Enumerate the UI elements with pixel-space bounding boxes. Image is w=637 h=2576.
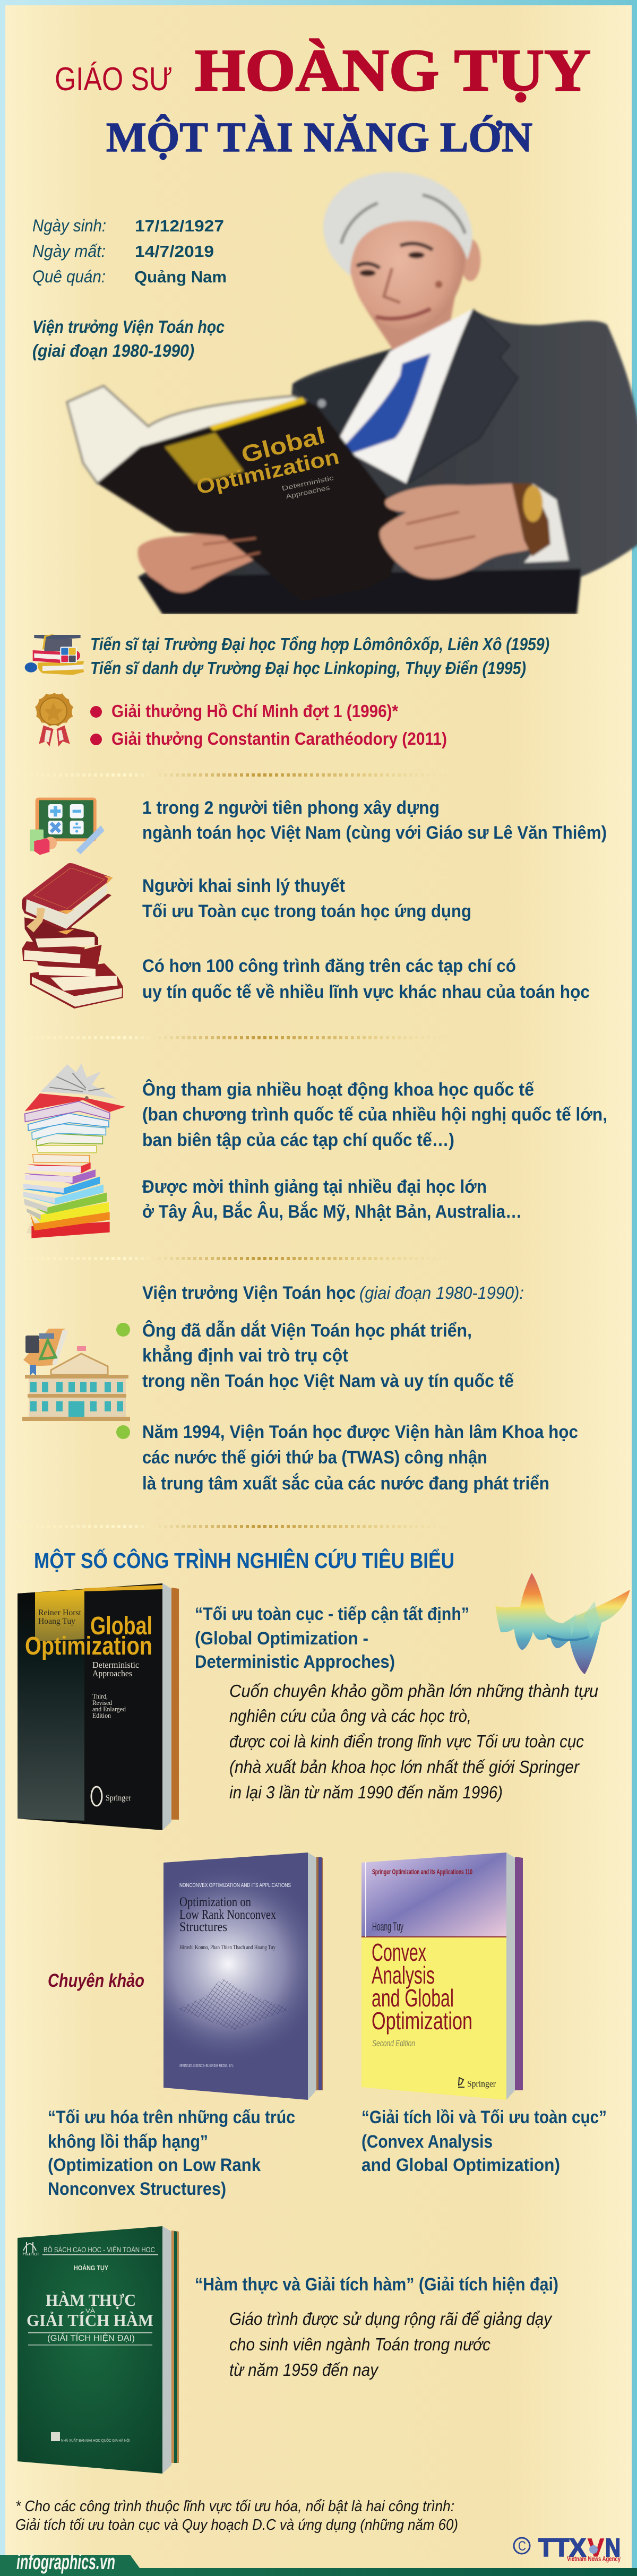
book: Convex Analysis and Global Optimization: Convex: [372, 1939, 426, 1966]
caption: convex analysis: “Giải tích lồi và Tối ưu toàn cục”: [361, 2107, 607, 2127]
book description: Global Optimization: “Tối ưu toàn cục - tiếp cận tất định”: [195, 1604, 469, 1624]
book: Global Optimization: Deterministic: [92, 1660, 139, 1670]
book: Hàm thực và Giải tích hàm: GIẢI TÍCH HÀM: [27, 2311, 153, 2330]
book: Global Optimization: Third,: [92, 1692, 108, 1700]
bullet: leading the institute: [116, 1320, 514, 1391]
caption: convex analysis: (Convex Analysis: [361, 2132, 493, 2152]
icon: medal: [35, 693, 73, 747]
book: Convex Analysis and Global Optimization: Springer: [467, 2079, 496, 2089]
detail: hometown: Quảng Nam: [134, 268, 227, 286]
international activities text: (ban chương trình quốc tế của nhiều hội nghị quốc tế lớn,: [142, 1105, 607, 1125]
logo: TTXVN copyright: N: [605, 2534, 621, 2562]
book description: Hàm thực và Giải tích hàm: cho sinh viên ngành Toán trong nước: [229, 2334, 490, 2354]
bullet: TWAS recognition: Năm 1994, Viện Toán học được Viện hàn lâm Khoa học: [142, 1422, 578, 1442]
visiting lecturer text: ở Tây Âu, Bắc Âu, Bắc Mỹ, Nhật Bản, Australia…: [142, 1202, 522, 1222]
caption: low rank structures: Nonconvex Structures): [48, 2179, 226, 2199]
book description: Hàm thực và Giải tích hàm: Giáo trình được sử dụng rộng rãi để giảng dạy: [229, 2309, 553, 2329]
book: Optimization on Low Rank Nonconvex Structures: Low Rank Nonconvex: [179, 1908, 276, 1922]
book: Convex Analysis and Global Optimization: Analysis: [372, 1961, 435, 1989]
awards: Giải thưởng Constantin Carathéodory (2011): [111, 729, 447, 748]
caption: convex analysis: [361, 2107, 607, 2175]
institute heading: Viện trưởng Viện Toán học: [142, 1283, 356, 1303]
footnote: * Cho các công trình thuộc lĩnh vực tối ưu hóa, nổi bật là hai công trình:: [15, 2498, 454, 2515]
book: Hàm thực và Giải tích hàm: HOÀNG TỤY: [74, 2264, 108, 2272]
book: Convex Analysis and Global Optimization: Optimization: [372, 2007, 472, 2035]
subtitle: MỘT TÀI NĂNG LỚN: [106, 115, 532, 161]
book: Convex Analysis and Global Optimization: Hoang Tuy: [372, 1920, 403, 1933]
book description: Hàm thực và Giải tích hàm: [195, 2275, 558, 2380]
book: Global Optimization: Reiner Horst: [38, 1608, 82, 1617]
book: Hàm thực và Giải tích hàm: NHÀ XUẤT BẢN ĐẠI HỌC QUỐC GIA HÀ NỘI: [61, 2437, 130, 2443]
book: Global Optimization: Edition: [92, 1711, 111, 1719]
photo: professor reading Global Optimization: [67, 172, 637, 614]
pioneer text: [142, 798, 607, 843]
book description: Global Optimization: được coi là kinh điển trong lĩnh vực Tối ưu toàn cục: [229, 1731, 584, 1751]
caption: low rank structures: (Optimization on Low Rank: [48, 2155, 261, 2175]
book: Hàm thực và Giải tích hàm: VÀ: [85, 2307, 96, 2314]
book: Optimization on Low Rank Nonconvex Structures: Hiroshi Konno, Phan Thien Thach and Hoang Tuy: [179, 1943, 276, 1951]
book description: Global Optimization: Deterministic Approches): [195, 1652, 395, 1672]
book: Optimization on Low Rank Nonconvex Structures: [163, 1853, 323, 2100]
institute heading: (giai đoạn 1980-1990):: [359, 1283, 524, 1303]
institute heading: [142, 1283, 524, 1303]
book: Optimization on Low Rank Nonconvex Structures: Structures: [179, 1920, 227, 1934]
detail: date of birth: Ngày sinh:: [32, 216, 106, 235]
logo: TTXVN copyright: V: [588, 2534, 604, 2562]
detail: institute role: Viện trưởng Viện Toán học: [32, 317, 225, 337]
footer band: [0, 2551, 637, 2576]
logo: TTXVN copyright: TTX: [538, 2534, 586, 2562]
book: Hàm thực và Giải tích hàm: [18, 2226, 179, 2474]
bullet: TWAS recognition: là trung tâm xuất sắc của các nước đang phát triển: [142, 1474, 549, 1494]
icon: chalkboard with math operators: [30, 798, 105, 855]
footer: website: infographics.vn: [16, 2551, 115, 2574]
book: Optimization on Low Rank Nonconvex Structures: SPRINGER-SCIENCE+BUSINESS MEDIA, B.V.: [179, 2064, 234, 2068]
publications text: [142, 956, 590, 1002]
book: Global Optimization: [18, 1583, 179, 1830]
caption: low rank structures: “Tối ưu hóa trên những cấu trúc: [48, 2107, 295, 2127]
logo: TTXVN copyright: [514, 2534, 621, 2563]
degrees: [90, 634, 549, 678]
book: Optimization on Low Rank Nonconvex Structures: Optimization on: [179, 1895, 251, 1909]
bullet: TWAS recognition: các nước thế giới thứ ba (TWAS) công nhận: [142, 1448, 487, 1468]
section heading: MỘT SỐ CÔNG TRÌNH NGHIÊN CỨU TIÊU BIỂU: [34, 1548, 454, 1573]
logo: TTXVN copyright: C: [518, 2539, 526, 2554]
awards: Giải thưởng Hồ Chí Minh đợt 1 (1996)*: [111, 701, 398, 721]
icon: graduation cap and books: [25, 634, 84, 675]
title line: Giáo sư: GIÁO SƯ: [55, 61, 173, 98]
book: Optimization on Low Rank Nonconvex Structures: NONCONVEX OPTIMIZATION AND ITS APPLICATIONS: [179, 1882, 291, 1889]
book description: Global Optimization: [195, 1604, 598, 1802]
book: Hàm thực và Giải tích hàm: (GIẢI TÍCH HIỆN ĐẠI): [47, 2333, 135, 2343]
book description: Global Optimization: (Global Optimization -: [195, 1629, 368, 1649]
book: Hàm thực và Giải tích hàm: HÀM THỰC: [46, 2290, 136, 2310]
international activities text: ban biên tập của các tạp chí quốc tế…): [142, 1130, 454, 1150]
degrees: Tiến sĩ danh dự Trường Đại học Linkoping, Thụy Điển (1995): [90, 658, 526, 678]
caption: low rank structures: không lồi thấp hạng”: [48, 2132, 208, 2152]
pioneer text: ngành toán học Việt Nam (cùng với Giáo sư Lê Văn Thiêm): [142, 823, 607, 843]
book: Global Optimization: Springer: [106, 1794, 132, 1803]
book: Hàm thực và Giải tích hàm: Hanoi: [22, 2251, 39, 2256]
footnote: Giải tích tối ưu toàn cục và Quy hoạch D.C và ứng dụng (những năm 60): [15, 2517, 458, 2534]
label: monographs: Chuyên khảo: [48, 1970, 144, 1991]
photo: professor reading Global Optimization: Global: [239, 423, 328, 468]
photo: professor reading Global Optimization: Deterministic: [281, 474, 334, 492]
book description: Global Optimization: nghiên cứu của ông và các học trò,: [229, 1706, 471, 1726]
book: Hàm thực và Giải tích hàm: BỘ SÁCH CAO HỌC - VIỆN TOÁN HỌC: [44, 2245, 155, 2254]
book: Convex Analysis and Global Optimization: Second Edition: [372, 2038, 415, 2048]
visiting lecturer text: Được mời thỉnh giảng tại nhiều đại học lớn: [142, 1177, 487, 1197]
book: Convex Analysis and Global Optimization: and Global: [372, 1984, 454, 2012]
icon: rainbow stack of books with open book: [22, 1063, 126, 1238]
detail: institute role: [32, 317, 225, 360]
book description: Global Optimization: (nhà xuất bản khoa học lớn nhất thế giới Springer: [229, 1757, 580, 1777]
degrees: Tiến sĩ tại Trường Đại học Tổng hợp Lômônôxốp, Liên Xô (1959): [90, 634, 549, 654]
footnote: [15, 2498, 458, 2534]
book: Global Optimization: Hoang Tuy: [38, 1617, 75, 1626]
detail: date of death: Ngày mất:: [32, 242, 106, 261]
book: Global Optimization: Approaches: [92, 1668, 132, 1678]
bullet: TWAS recognition: [116, 1422, 578, 1494]
detail: date of death: 14/7/2019: [135, 242, 214, 261]
chart: 3D surface plot: [495, 1573, 630, 1674]
detail: hometown: [32, 267, 227, 286]
bullet: leading the institute: Ông đã dẫn dắt Viện Toán học phát triển,: [142, 1320, 472, 1341]
detail: hometown: Quê quán:: [32, 267, 106, 286]
international activities text: Ông tham gia nhiều hoạt động khoa học quốc tế: [142, 1079, 534, 1100]
detail: institute role: (giai đoạn 1980-1990): [32, 341, 194, 360]
visiting lecturer text: [142, 1177, 522, 1222]
book: Global Optimization: Global: [90, 1612, 152, 1640]
caption: low rank structures: [48, 2107, 295, 2199]
detail: date of birth: 17/12/1927: [135, 217, 224, 235]
founding theory text: [142, 876, 471, 921]
book: Global Optimization: Revised: [92, 1699, 112, 1707]
book description: Global Optimization: Cuốn chuyên khảo gồm phần lớn những thành tựu: [229, 1681, 598, 1701]
book: Convex Analysis and Global Optimization: [361, 1853, 523, 2100]
bullet: leading the institute: khẳng định vai trò trụ cột: [142, 1345, 348, 1366]
founding theory text: Tối ưu Toàn cục trong toán học ứng dụng: [142, 901, 471, 921]
bullet: leading the institute: trong nền Toán học Việt Nam và uy tín quốc tế: [142, 1371, 514, 1391]
photo: professor reading Global Optimization: Optimization: [194, 445, 341, 499]
book description: Hàm thực và Giải tích hàm: từ năm 1959 đến nay: [229, 2360, 379, 2380]
title line: Hoàng Tụy: HOÀNG TỤY: [195, 38, 591, 104]
title: [55, 38, 591, 161]
book: Global Optimization: Optimization: [25, 1632, 152, 1660]
founding theory text: Người khai sinh lý thuyết: [142, 876, 345, 896]
caption: convex analysis: and Global Optimization): [361, 2155, 560, 2175]
pioneer text: 1 trong 2 người tiên phong xây dựng: [142, 798, 440, 818]
publications text: Có hơn 100 công trình đăng trên các tạp chí có: [142, 956, 516, 976]
book description: Global Optimization: in lại 3 lần từ năm 1990 đến năm 1996): [229, 1782, 503, 1802]
icon: school building with book: [22, 1329, 130, 1421]
detail: date of death: [32, 242, 214, 261]
detail: date of birth: [32, 216, 224, 235]
icon: stack of red books: [22, 863, 123, 1009]
book: Global Optimization: and Enlarged: [92, 1705, 126, 1713]
international activities text: [142, 1079, 607, 1150]
personal details: [32, 216, 227, 360]
book: Convex Analysis and Global Optimization: Springer Optimization and Its Applications 110: [372, 1867, 472, 1876]
publications text: uy tín quốc tế về nhiều lĩnh vực khác nhau của toán học: [142, 982, 590, 1002]
awards: [90, 701, 447, 748]
book description: Hàm thực và Giải tích hàm: “Hàm thực và Giải tích hàm” (Giải tích hiện đại): [195, 2275, 558, 2295]
photo: professor reading Global Optimization: Approaches: [285, 484, 331, 501]
